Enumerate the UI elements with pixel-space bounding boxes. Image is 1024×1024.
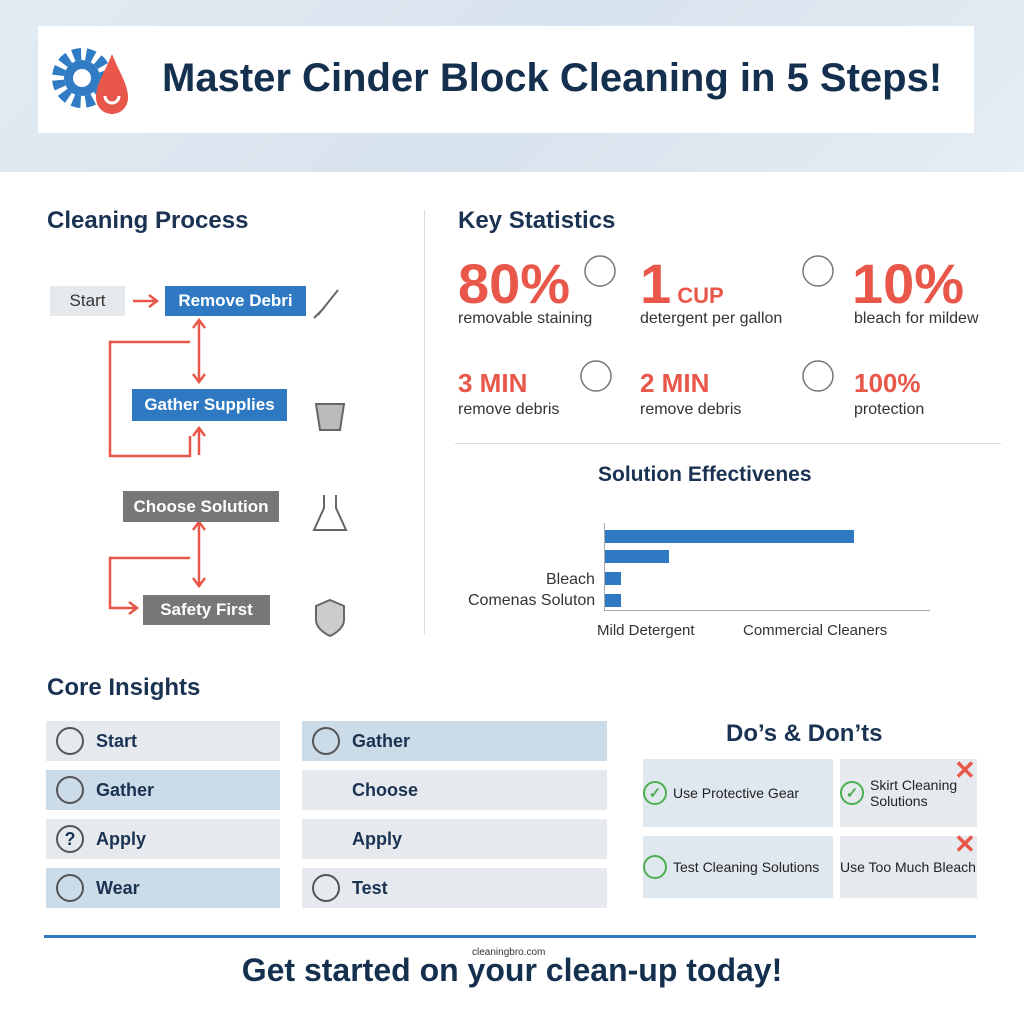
stats: 3 MIN [458, 368, 527, 398]
step: start: Start [70, 291, 105, 310]
stats: 1 CUP [640, 252, 724, 315]
stats: bleach for mildew [854, 310, 978, 327]
core insights grid: Start [96, 730, 137, 750]
divider [424, 210, 425, 635]
stats: 100% [854, 368, 920, 398]
icon: gear and drop [52, 48, 128, 114]
core insights grid: Test [352, 878, 388, 898]
do's and don'ts grid: ✓ [846, 785, 858, 802]
do's and don'ts grid: ✓ [649, 785, 661, 802]
flowchart [50, 286, 348, 638]
icons [312, 289, 348, 638]
do's and don'ts grid: ✕ [954, 829, 976, 859]
stats: detergent per gallon [640, 310, 782, 327]
heading: key statistics: Key Statistics [458, 207, 615, 234]
do's and don'ts grid: Test Cleaning Solutions [673, 859, 819, 875]
stats: 2 MIN [640, 368, 709, 398]
heading: do's & don'ts: Do’s & Don’ts [726, 720, 882, 747]
stats: remove debris [640, 401, 741, 418]
stats [458, 252, 979, 418]
stats: 10% [852, 252, 964, 315]
core insights grid [46, 721, 607, 908]
chart: solution effectiveness: Commercial Cleaners [743, 622, 887, 639]
footer line [44, 935, 976, 938]
chart: solution effectiveness [468, 463, 930, 639]
step: remove debri: Remove Debri [178, 291, 293, 310]
do's and don'ts grid: Skirt Cleaning [870, 777, 957, 793]
do's and don'ts grid: ✕ [954, 755, 976, 785]
step: safety first: Safety First [160, 600, 253, 619]
heading: cleaning process: Cleaning Process [47, 207, 248, 234]
core insights grid: ? [64, 829, 76, 849]
step: choose solution [123, 491, 279, 522]
stats: 80% [458, 252, 570, 315]
step: choose solution: Choose Solution [133, 496, 269, 516]
chart: solution effectiveness: Bleach [546, 571, 595, 588]
core insights grid: Gather [352, 730, 410, 750]
step: safety first [143, 595, 270, 625]
stats: removable staining [458, 310, 592, 327]
do's and don'ts grid: Use Protective Gear [673, 785, 799, 801]
core insights grid: Apply [352, 828, 402, 848]
title: Master Cinder Block Cleaning in 5 Steps! [162, 56, 942, 100]
heading: core insights: Core Insights [47, 674, 200, 701]
footer url: cleaningbro.com [472, 947, 545, 958]
core insights grid: Gather [96, 780, 154, 800]
chart: solution effectiveness: Mild Detergent [597, 622, 695, 639]
stats: remove debris [458, 401, 559, 418]
do's and don'ts grid: Solutions [870, 793, 928, 809]
title card [38, 26, 974, 133]
do's and don'ts grid [643, 755, 977, 898]
header background [0, 0, 1024, 172]
core insights grid: Wear [96, 878, 140, 898]
step: remove debri [165, 286, 306, 316]
step: gather supplies: Gather Supplies [144, 395, 275, 414]
step: gather supplies [132, 389, 287, 421]
chart: solution effectiveness: Comenas Soluton [468, 592, 595, 609]
stats: protection [854, 401, 924, 418]
step: start [50, 286, 125, 316]
core insights grid: Apply [96, 828, 146, 848]
footer call to action: Get started on your clean-up today! [242, 952, 782, 988]
do's and don'ts grid: Use Too Much Bleach [840, 859, 976, 875]
core insights grid: Choose [352, 780, 418, 800]
chart: solution effectiveness: Solution Effectivenes [598, 463, 812, 486]
